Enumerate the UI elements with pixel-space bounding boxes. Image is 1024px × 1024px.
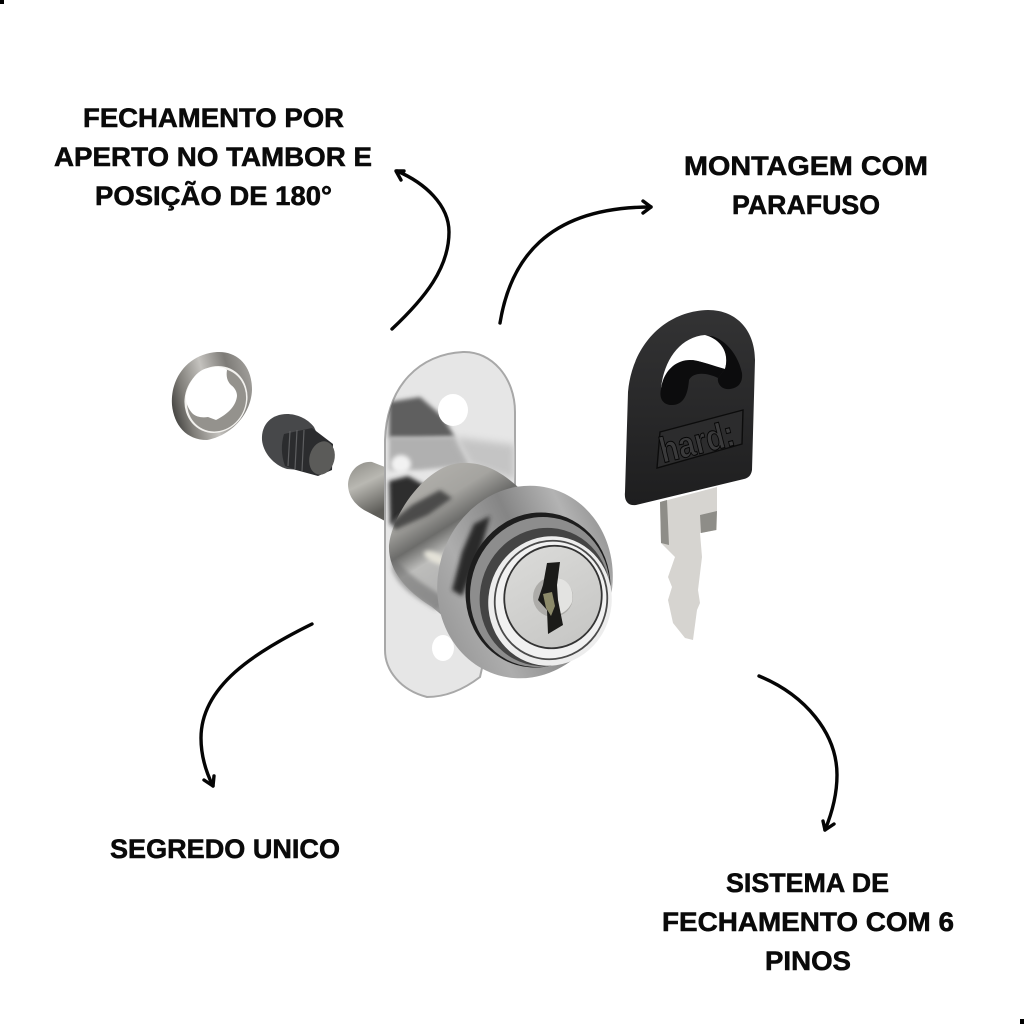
- plate reflections: [389, 397, 515, 525]
- key recess left blob: [660, 360, 725, 405]
- label: segredo unico: SEGREDO UNICO: [110, 834, 340, 864]
- mounting plate: [385, 352, 515, 697]
- arrow: to segredo unico: [201, 624, 312, 786]
- barrel: [389, 463, 518, 622]
- label: sistema de fechamento: [662, 868, 954, 976]
- label: montagem com parafuso: MONTAGEM COM: [684, 151, 928, 181]
- flange: [415, 465, 635, 699]
- icon: key: [625, 310, 755, 640]
- key blade: [660, 487, 717, 640]
- corner mark top-left: [0, 0, 4, 4]
- logo text: hard:: [655, 413, 739, 471]
- key head: [625, 310, 755, 505]
- label: montagem com parafuso: PARAFUSO: [732, 190, 880, 220]
- groove and inner chrome: [481, 527, 621, 673]
- bottom screw hole: [432, 635, 454, 661]
- arrow: to fechamento por aperto: [392, 171, 449, 329]
- arrow: to montagem: [500, 201, 651, 323]
- arrow: to sistema de fechamento: [759, 676, 837, 830]
- key recess right arc: [705, 335, 742, 389]
- keyhole: [533, 562, 573, 634]
- label: fechamento por aperto: POSIÇÃO DE 180°: [95, 180, 332, 211]
- dark ring: [447, 495, 629, 685]
- flange dark junction: [452, 516, 490, 596]
- top screw hole: [438, 394, 468, 426]
- label: fechamento por aperto: [54, 103, 372, 211]
- chrome ring: [473, 522, 627, 680]
- label: fechamento por aperto: FECHAMENTO POR: [83, 103, 344, 133]
- label: sistema de fechamento: FECHAMENTO COM 6: [662, 907, 954, 937]
- key opening: [661, 335, 726, 388]
- icon: set screw: [262, 414, 338, 478]
- inner shade band: [463, 512, 627, 682]
- lock body: [385, 352, 635, 699]
- corner mark bottom-right: [1020, 1019, 1024, 1024]
- cylinder face: [492, 534, 614, 660]
- blade shadow: [660, 500, 717, 545]
- label: fechamento por aperto: APERTO NO TAMBOR E: [54, 142, 372, 172]
- label: sistema de fechamento: PINOS: [765, 946, 851, 976]
- label: sistema de fechamento: SISTEMA DE: [726, 868, 889, 898]
- label: montagem com parafuso: [684, 151, 928, 220]
- icon: ring washer: [172, 352, 258, 443]
- grey band: [452, 500, 628, 684]
- logo plate: [657, 410, 743, 468]
- barrel shading: [391, 490, 452, 610]
- icon: rear pin: [348, 462, 385, 521]
